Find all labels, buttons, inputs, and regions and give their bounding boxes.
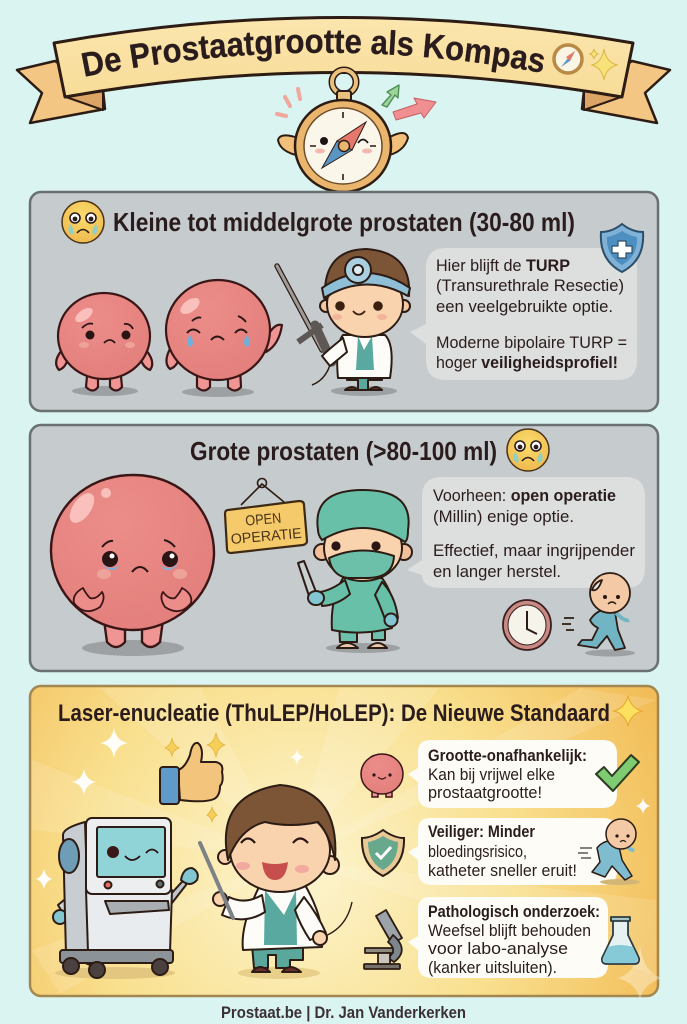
compass mascot xyxy=(277,70,436,192)
bubble text: Moderne bipolaire TURP = xyxy=(436,333,627,352)
doctor hair xyxy=(226,785,335,860)
doctor head xyxy=(230,808,330,892)
face xyxy=(97,540,187,579)
happy doctor xyxy=(200,785,352,972)
left ribbon tail xyxy=(17,61,105,123)
icon: small compass xyxy=(554,45,582,73)
machine buttons xyxy=(104,882,112,888)
heading: Kleine tot middelgrote prostaten (30-80 ml) xyxy=(113,207,575,237)
doctor with head mirror xyxy=(320,249,410,390)
text: (kanker uitsluiten). xyxy=(428,958,557,977)
bubble text: Effectief, maar ingrijpender xyxy=(433,541,635,560)
bubble text xyxy=(433,486,635,581)
doctor legs xyxy=(252,945,303,968)
machine face xyxy=(107,846,158,860)
doctor ears xyxy=(320,300,332,312)
machine base xyxy=(60,950,173,963)
footer: Prostaat.be | Dr. Jan Vanderkerken xyxy=(221,1003,466,1022)
line: Veiliger: Minder xyxy=(428,822,535,841)
icon: green check xyxy=(596,755,639,791)
sparkles xyxy=(36,728,650,889)
machine screen xyxy=(97,827,165,877)
compass loop xyxy=(332,70,356,94)
doctor hair xyxy=(325,249,409,300)
line: Hier blijft de TURP xyxy=(436,256,570,275)
small prostate character xyxy=(56,293,152,390)
compass wings xyxy=(278,133,408,156)
head band xyxy=(322,273,410,298)
sign text: OPEN xyxy=(245,511,282,530)
shadow xyxy=(331,386,397,396)
doctor face xyxy=(236,838,309,880)
surgeon arms xyxy=(320,580,398,622)
icon: crying emoji xyxy=(507,429,549,471)
laser machine mascot xyxy=(53,818,198,978)
legs xyxy=(104,620,163,647)
right ribbon tail xyxy=(582,61,670,123)
compass face xyxy=(315,137,372,154)
icon: sparkles xyxy=(590,49,617,80)
shadow xyxy=(55,967,175,979)
callout: pathology xyxy=(408,897,608,978)
text: bloedingsrisico, xyxy=(428,842,527,861)
bubble text: hoger veiligheidsprofiel! xyxy=(436,353,618,372)
surgeon cap xyxy=(317,490,409,542)
machine left arm xyxy=(58,890,84,915)
icon: clock xyxy=(503,600,551,650)
panel background xyxy=(30,192,658,411)
icon: safety shield xyxy=(362,830,404,876)
pink arrow xyxy=(393,98,436,120)
doctor scrub xyxy=(264,890,297,945)
line: Pathologisch onderzoek: xyxy=(428,902,600,921)
bubble text xyxy=(436,256,627,372)
icon: flask xyxy=(602,917,639,964)
bubble text: (Transurethrale Resectie) xyxy=(436,276,624,295)
icon: sparkle star xyxy=(614,696,642,726)
head mirror xyxy=(345,257,371,283)
heading: Laser-enucleatie (ThuLEP/HoLEP): De Nieuwe Standaard xyxy=(58,700,610,727)
sign string xyxy=(241,484,284,505)
compass case xyxy=(295,100,391,192)
surgeon head xyxy=(324,515,402,581)
heading: Grote prostaten (>80-100 ml) xyxy=(190,436,497,466)
machine wheels xyxy=(63,958,79,974)
compass needle xyxy=(337,122,366,150)
surgical mask xyxy=(329,550,394,578)
bubble text: een veelgebruikte optie. xyxy=(436,297,613,316)
compass dial xyxy=(304,108,382,184)
surgeon gown xyxy=(332,578,394,633)
icon: running patient xyxy=(578,819,640,885)
icon: thumbs up xyxy=(160,733,225,822)
shadow xyxy=(238,967,320,979)
panel: large prostates xyxy=(30,425,658,671)
panel background xyxy=(30,425,658,671)
face xyxy=(73,305,135,348)
bubble text: en langer herstel. xyxy=(433,562,561,581)
shadow xyxy=(82,640,184,656)
body xyxy=(58,293,150,379)
bubble xyxy=(408,740,617,808)
doctor coat xyxy=(243,885,322,950)
ribbon folds xyxy=(66,90,621,110)
icon: large faint sparkle xyxy=(618,945,662,1000)
speech bubble xyxy=(407,477,645,588)
doctor scrub xyxy=(356,336,374,370)
text xyxy=(428,902,600,977)
hand xyxy=(178,743,223,801)
ribbon band xyxy=(54,18,633,97)
icon: medical shield xyxy=(601,224,643,272)
title banner xyxy=(16,16,672,124)
sign board xyxy=(225,501,307,553)
doctor arms xyxy=(222,895,326,940)
highlights xyxy=(65,488,111,527)
doctor head xyxy=(327,271,403,337)
panel background xyxy=(30,686,658,996)
icon: running patient xyxy=(562,573,635,656)
green arrow xyxy=(382,85,399,107)
surgeon eyes xyxy=(331,541,381,551)
icon: small happy prostate xyxy=(361,754,403,797)
surgeon xyxy=(298,490,412,648)
speech bubble xyxy=(410,248,637,380)
compass ticks xyxy=(310,112,376,180)
icon: crying emoji xyxy=(62,201,104,243)
shadow xyxy=(72,386,138,396)
text: katheter sneller eruit! xyxy=(428,861,577,880)
machine monitor xyxy=(86,818,171,894)
panel: small to medium prostates xyxy=(30,192,658,411)
icon: microscope xyxy=(364,910,402,969)
text: voor labo-analyse xyxy=(428,939,568,958)
doctor legs xyxy=(347,368,382,390)
laser instrument xyxy=(200,843,233,918)
thumb sparkles xyxy=(165,733,225,822)
panel: laser enucleation xyxy=(30,686,662,1000)
resectoscope instrument xyxy=(277,266,332,385)
doctor coat xyxy=(337,335,392,378)
bubble text: (Millin) enige optie. xyxy=(433,507,574,526)
shadow xyxy=(326,643,400,653)
machine right arm xyxy=(170,873,190,903)
doctor arm xyxy=(322,338,347,366)
wire xyxy=(253,902,352,942)
callout: size independent xyxy=(408,740,617,808)
legs and arms xyxy=(166,325,282,390)
line: Grootte-onafhankelijk: xyxy=(428,746,587,765)
machine side xyxy=(63,822,90,965)
rays xyxy=(32,688,656,994)
hands xyxy=(74,588,191,611)
bubble xyxy=(408,818,617,885)
text xyxy=(428,746,587,802)
machine keyboard xyxy=(105,901,169,914)
text xyxy=(428,822,577,880)
face xyxy=(178,295,250,347)
legs and arms xyxy=(56,350,152,390)
surgeon legs xyxy=(339,622,385,642)
body xyxy=(51,475,214,630)
bubble xyxy=(408,897,608,978)
doctor ears xyxy=(218,850,232,864)
large prostate character xyxy=(51,475,214,647)
medium prostate character xyxy=(166,280,282,390)
surprise marks xyxy=(277,89,300,116)
text: Kan bij vrijwel elke xyxy=(428,765,555,784)
text: Weefsel blijft behouden xyxy=(428,921,591,940)
surgeon ears xyxy=(314,544,330,560)
cuff xyxy=(160,767,179,804)
doctor face xyxy=(332,301,387,320)
scalpel xyxy=(298,561,316,596)
open operatie hanging sign xyxy=(225,478,307,553)
text: prostaatgrootte! xyxy=(428,783,542,802)
title text: De Prostaatgrootte als Kompas xyxy=(82,30,544,77)
body xyxy=(166,280,270,380)
line: Voorheen: open operatie xyxy=(433,486,616,505)
sign text: OPERATIE xyxy=(230,526,303,548)
callout: safer xyxy=(408,818,617,885)
machine lower body xyxy=(86,890,172,952)
